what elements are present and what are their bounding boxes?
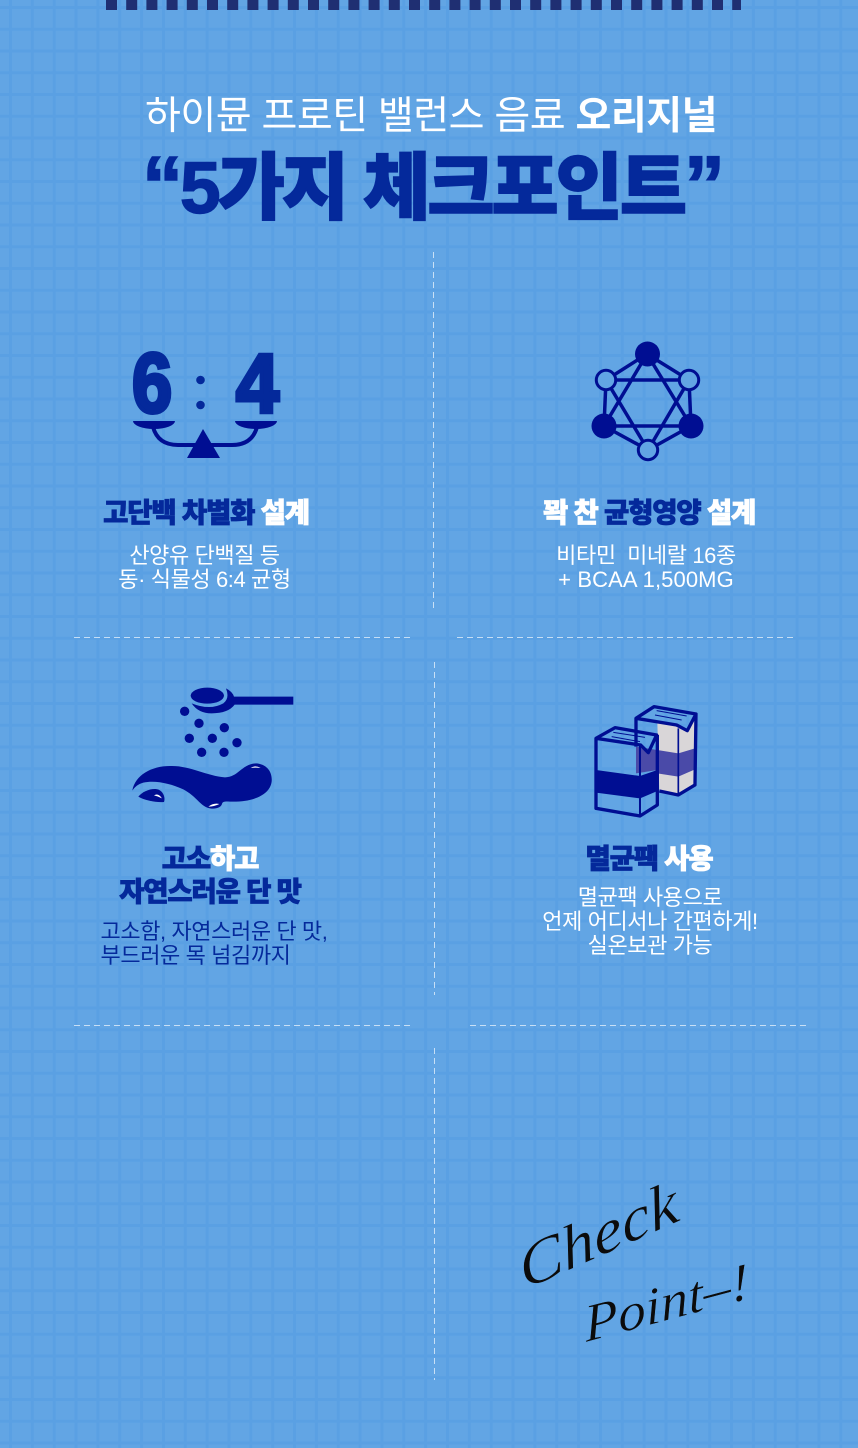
- icon: 6:4 balance scale: 6: [132, 336, 172, 430]
- icon: spoon and syrup: [132, 688, 294, 809]
- heading: 고단백 차별화 설계: 고단백 차별화 설계: [103, 497, 309, 528]
- text: sterile pack: 멸균팩 사용으로: [578, 885, 722, 910]
- subtitle: 하이뮨 프로틴 밸런스 음료 오리지널: [145, 95, 717, 138]
- icon: 6:4 balance scale: 4: [236, 337, 279, 431]
- icon: 6:4 balance scale: [132, 336, 280, 458]
- text: sterile pack: 실온보관 가능: [588, 933, 712, 958]
- text: protein balance: 산양유 단백질 등: [129, 543, 280, 568]
- text: taste: 부드러운 목 넘김까지: [101, 943, 291, 968]
- handwritten note: Check Point: Check: [513, 1167, 685, 1304]
- heading: 고소하고 자연스러운 단 맛: 고소하고: [162, 843, 258, 874]
- text: taste: [101, 919, 327, 968]
- heading: 고소하고 자연스러운 단 맛: [119, 843, 302, 907]
- text: vitamins: + BCAA 1,500MG: [558, 567, 734, 592]
- title: “5가지 체크포인트”: [142, 140, 720, 231]
- icon: milk cartons: [594, 705, 698, 818]
- handwritten note: Check Point: Point–!: [581, 1252, 751, 1354]
- text: vitamins: 비타민 미네랄 16종: [556, 543, 736, 568]
- text: sterile pack: 언제 어디서나 간편하게!: [542, 909, 758, 934]
- text: taste: 고소함, 자연스러운 단 맛,: [101, 919, 327, 944]
- text: protein balance: [118, 543, 291, 592]
- heading: 고소하고 자연스러운 단 맛: 자연스러운 단 맛: [119, 876, 301, 907]
- text: vitamins: [556, 543, 736, 592]
- heading: 멸균팩 사용: 멸균팩 사용: [586, 843, 712, 874]
- text: sterile pack: [542, 885, 758, 958]
- top dashed border: [106, 0, 741, 10]
- text: protein balance: 동· 식물성 6:4 균형: [118, 567, 291, 592]
- heading: 꽉 찬 균형영양 설계: 꽉 찬 균형영양 설계: [543, 497, 755, 528]
- icon: molecule: [592, 342, 704, 462]
